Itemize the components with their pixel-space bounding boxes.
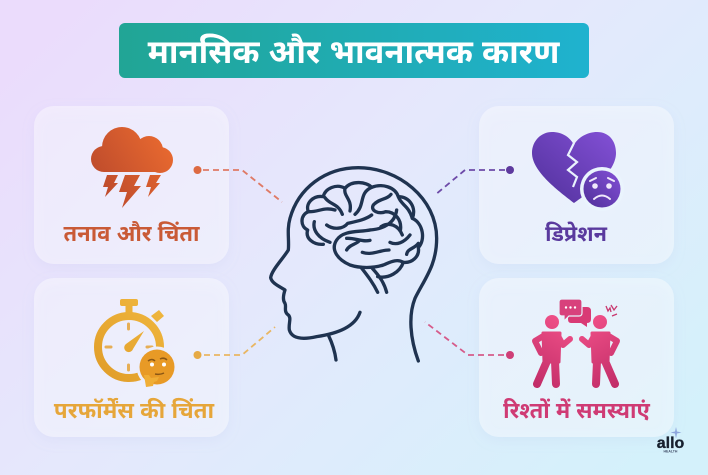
speech bubbles [559,299,591,327]
label: performance anxiety: परफॉर्मेंस की चिंता [54,397,214,423]
connector: performance [194,327,275,359]
label: depression: डिप्रेशन [545,221,608,246]
logo: allo health: allo [657,435,685,452]
logo: allo health [657,427,685,454]
panel: stress and anxiety [34,106,229,264]
title banner [119,23,589,78]
connector: depression [435,166,514,195]
title banner: मानसिक और भावनात्मक कारण [148,33,560,70]
icon: two arguing people [535,299,617,384]
right person [582,315,617,384]
central head and brain [271,168,437,361]
panel: relationship problems [479,278,674,437]
label: relationship problems: रिश्तों में समस्याएं [503,398,650,423]
panel: performance anxiety [34,278,229,437]
icon: stopwatch with thinking face [98,299,178,388]
logo: allo health: HEALTH [664,450,678,454]
connector: relationships [425,322,514,359]
panel: depression [479,106,674,264]
connector: stress [194,166,282,202]
icon: broken heart with sad face [532,132,624,211]
label: stress and anxiety: तनाव और चिंता [64,221,200,246]
left person [535,315,570,384]
icon: storm cloud [91,127,173,208]
